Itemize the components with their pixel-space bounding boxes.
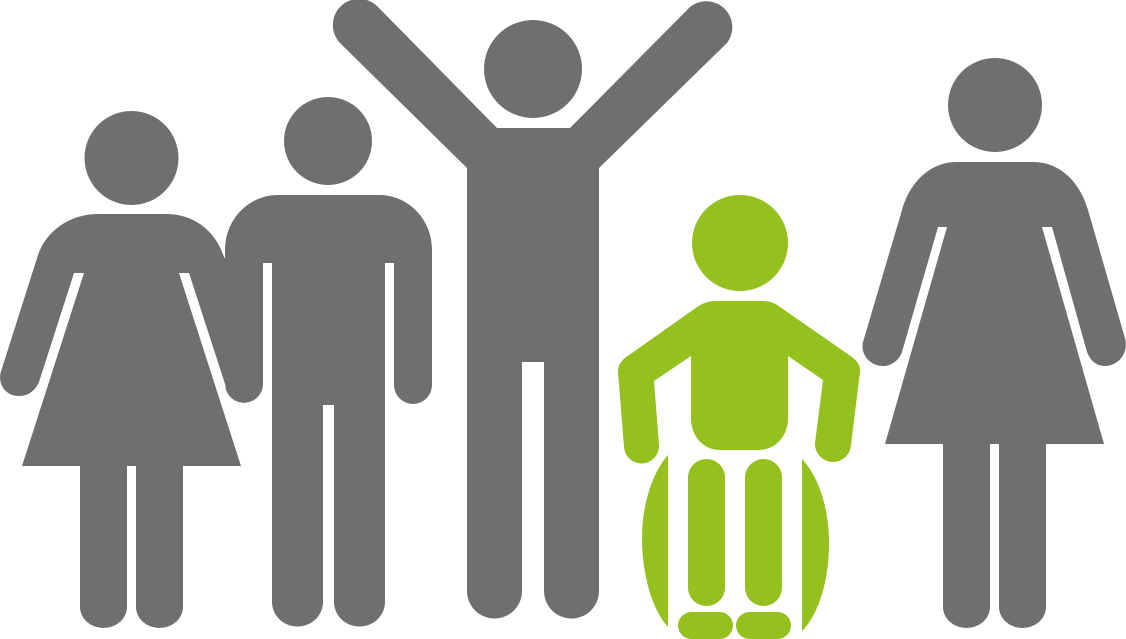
body xyxy=(0,214,262,628)
head xyxy=(84,111,178,205)
left wheel xyxy=(642,455,668,627)
figure: person in wheelchair xyxy=(618,195,860,639)
right leg xyxy=(745,459,782,606)
body xyxy=(333,0,732,618)
body xyxy=(225,195,432,626)
torso and arms xyxy=(618,301,860,464)
figure: woman left xyxy=(0,111,262,628)
head xyxy=(948,58,1042,152)
left foot xyxy=(678,612,733,639)
right foot xyxy=(736,612,791,639)
figure: man xyxy=(225,97,432,626)
figure: woman right xyxy=(862,58,1126,628)
head xyxy=(284,97,372,185)
head xyxy=(692,195,788,291)
figure: man with raised arms xyxy=(333,0,732,618)
right wheel xyxy=(802,459,829,631)
head xyxy=(484,20,582,118)
left leg xyxy=(688,459,725,606)
body xyxy=(862,162,1126,628)
